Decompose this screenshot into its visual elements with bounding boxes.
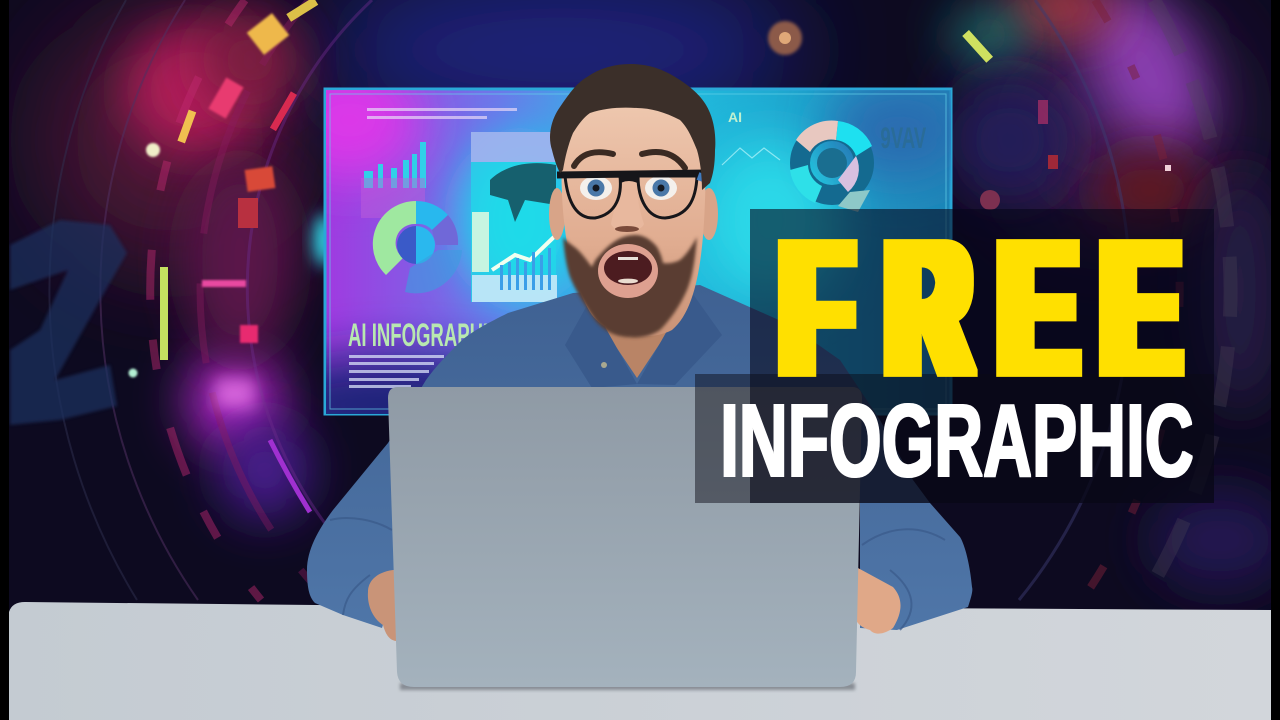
tunnel arcs [49,0,1231,600]
screen heading: AI INFOGRAPHIC [348,317,502,353]
glasses [557,173,709,218]
screen ring chart right [790,120,872,212]
screen small AI label: AI [728,109,742,125]
collar button [601,362,607,368]
laptop lid [388,387,862,687]
screen line chart [722,148,780,165]
screen donut chart [373,201,462,293]
headline FREE: FREE [781,202,1178,415]
screen bar chart [361,142,426,218]
glowing fragments [128,0,1171,512]
hand right [856,568,901,634]
neck [606,328,666,378]
eyes [580,176,677,200]
screen inner frame [330,94,946,409]
mouth [598,244,658,298]
screen number label: 9VAV [880,122,926,155]
face [557,105,709,337]
infographic screen [324,88,952,416]
hair [550,64,715,190]
screen body text lines [349,355,444,388]
nostrils [615,226,639,232]
beard [563,235,697,337]
screen text lines top left [367,108,517,119]
headline INFOGRAPHIC: INFOGRAPHIC [720,384,1194,498]
eyebrows [574,152,685,168]
sleeve folds and cuffs [330,518,945,630]
laptop shadow [400,683,855,690]
cyan glow at screen edge [314,214,334,266]
translucent panel behind FREE [750,209,1214,503]
table [9,602,1271,720]
laptop [388,387,862,690]
ears [549,188,718,240]
person [307,64,972,641]
screen world map panel [471,132,557,302]
shirt body and arms [307,285,972,630]
collar [566,302,722,387]
translucent panel behind INFOGRAPHIC [695,374,1214,503]
hand left [368,570,396,641]
nose [612,217,644,229]
blue numeral shape [10,220,127,425]
screen glow colours [326,90,951,414]
